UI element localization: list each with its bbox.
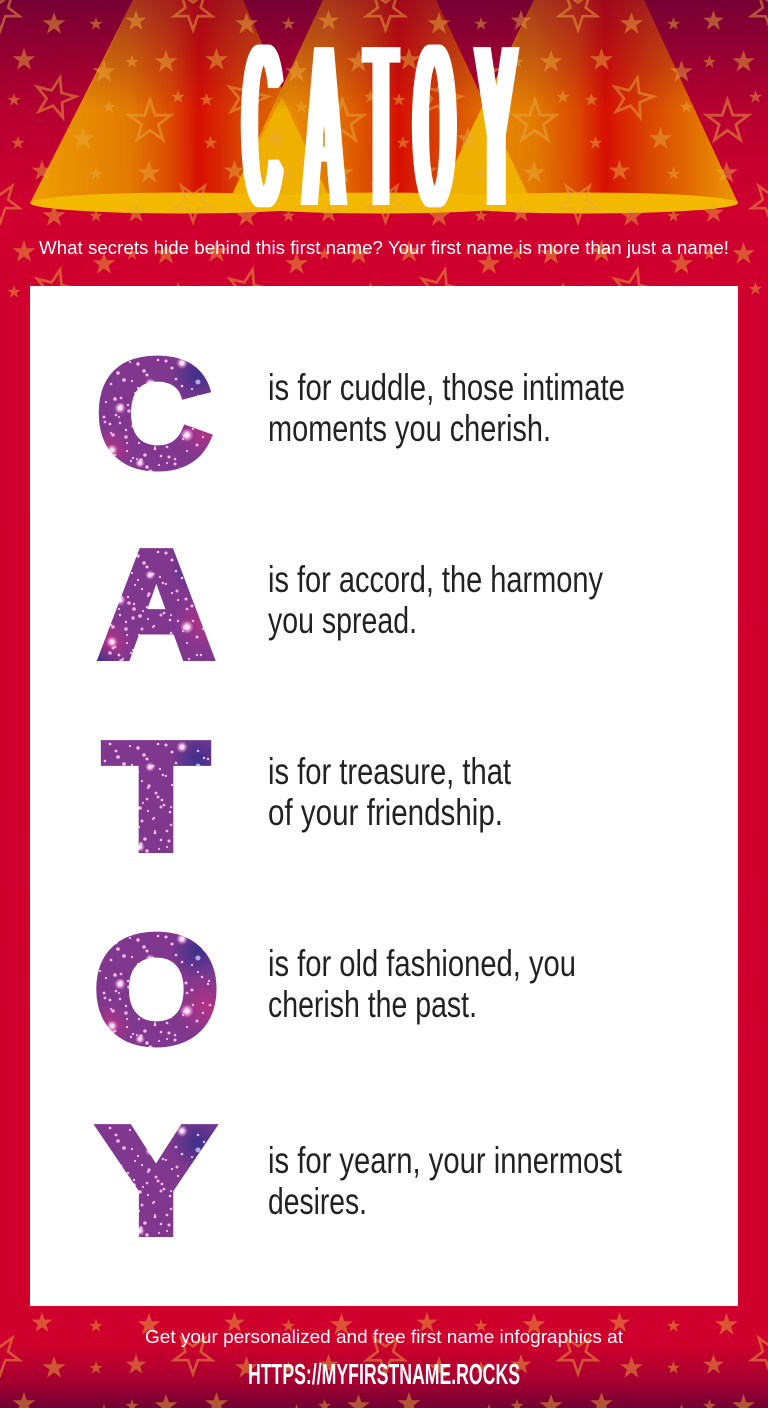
letter row: A [100,520,603,688]
text: C meaning: is for cuddle, those intimate [268,367,625,408]
text: C meaning: moments you cherish. [268,408,551,449]
spotlights [30,0,738,214]
text: T meaning [268,751,512,833]
big letter C: C [97,328,211,498]
text: O meaning: cherish the past. [268,984,477,1025]
letter row: T [104,712,512,880]
text: T meaning: is for treasure, that [268,751,512,792]
text: A meaning: you spread. [268,600,417,641]
text: O meaning: is for old fashioned, you [268,943,576,984]
star pattern: top [0,0,768,298]
text: O meaning [268,943,576,1025]
big letter O: O [94,904,218,1074]
text: Y meaning: is for yearn, your innermost [268,1140,623,1181]
text: A meaning [268,559,603,641]
text: T meaning: of your friendship. [268,792,503,833]
text: Y meaning: desires. [268,1181,367,1222]
text: A meaning: is for accord, the harmony [268,559,603,600]
subtitle: What secrets hide behind this first name? Your first name is more than just a name! [39,238,729,258]
text: C meaning [268,367,625,449]
footer url: HTTPS://MYFIRSTNAME.ROCKS [248,1359,520,1391]
big letter Y: Y [100,1096,212,1264]
letter row: Y [100,1096,623,1264]
letter row: C [97,328,625,498]
big letter T: T [104,712,208,880]
panel: white card [30,286,738,1306]
letter row: O [94,904,576,1074]
big letter A: A [100,520,213,688]
star pattern: bottom [0,1306,768,1408]
footer text: Get your personalized and free first name infographics at [145,1327,623,1347]
text: Y meaning [268,1140,623,1222]
